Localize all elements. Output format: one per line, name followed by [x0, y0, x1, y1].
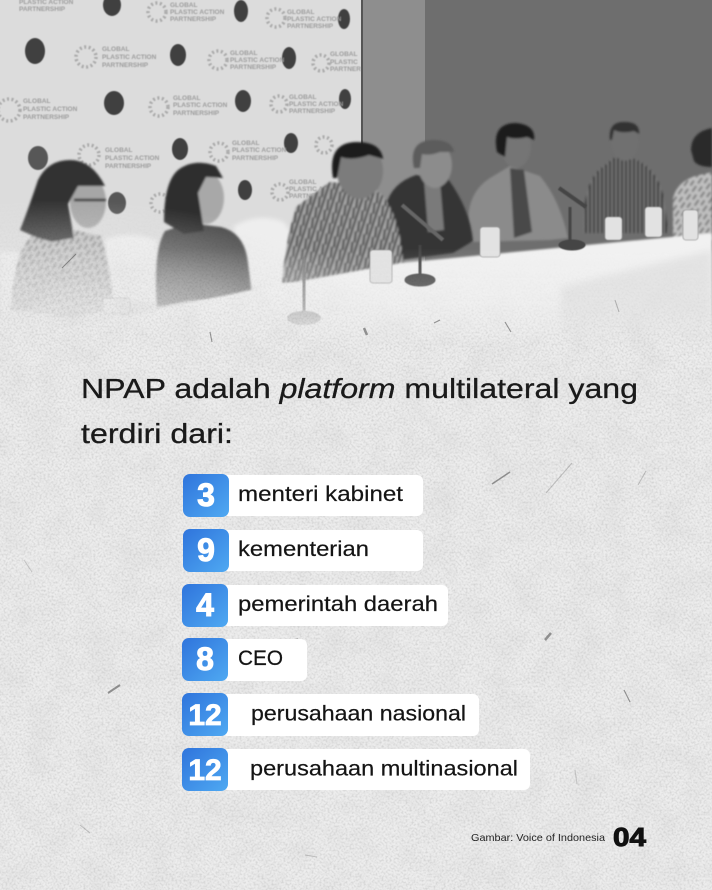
backdrop logos: wordmarks: GLOBAL [232, 140, 259, 147]
row: 12 perusahaan nasional [182, 693, 479, 736]
photo: white chair backs [2, 218, 289, 286]
backdrop logos: wordmarks: GLOBAL [230, 50, 257, 57]
photo: person 1 [11, 160, 114, 318]
photo: panel meeting at long table [0, 0, 712, 345]
photo: white table [202, 232, 712, 341]
photo: logo backdrop [0, 0, 363, 252]
backdrop logos: wordmarks: PLASTIC ACTION [289, 186, 344, 193]
backdrop logos: wordmarks: PLASTIC ACTION [289, 101, 344, 108]
backdrop logos: dotted rings [0, 3, 332, 212]
backdrop logos: wordmarks: PLASTIC ACTION [232, 147, 287, 154]
photo: person 6 [584, 122, 668, 233]
heading [81, 373, 638, 449]
row: 9 kementerian [183, 529, 423, 572]
backdrop logos: wordmarks: PARTNERSHIP [19, 6, 66, 13]
backdrop logos: wordmarks: PLASTIC ACTION [105, 155, 160, 162]
backdrop logos: dark ovals [25, 0, 351, 214]
photo: person 2 [156, 163, 252, 307]
image credit: Gambar: Voice of Indonesia [471, 832, 605, 844]
row: 3 menteri kabinet [183, 474, 423, 517]
photo: water glasses [103, 207, 698, 313]
backdrop logos: wordmarks: GLOBAL [287, 9, 314, 16]
backdrop logos: wordmarks: GLOBAL [173, 95, 200, 102]
row: 9 kementerian: 9 [197, 532, 215, 568]
backdrop logos: wordmarks: PLASTIC ACTION [170, 9, 225, 16]
backdrop logos: wordmarks: PARTNERSHIP [230, 64, 277, 71]
row: 3 menteri kabinet: 3 [197, 477, 215, 513]
photo: dark wall [425, 0, 712, 345]
photo: microphones [287, 188, 586, 325]
backdrop logos: wordmarks: PARTNERSHIP [173, 110, 220, 117]
photo: table cloth shadow [564, 252, 712, 310]
backdrop logos: wordmarks: PARTNERSHIP [289, 108, 336, 115]
heading: terdiri dari: [81, 418, 233, 449]
backdrop logos: wordmarks: GLOBAL [289, 94, 316, 101]
backdrop logos: wordmarks: GLOBAL [105, 147, 132, 154]
backdrop logos: wordmarks: PARTNERSHIP [105, 163, 152, 170]
row: 12 perusahaan nasional: 12 [188, 699, 222, 732]
row: 8 CEO [182, 638, 307, 681]
backdrop logos: wordmarks: GLOBAL [170, 2, 197, 9]
row: 8 CEO: CEO [238, 647, 283, 670]
photo: person 4 [386, 140, 473, 262]
backdrop logos: wordmarks: PARTNERSHIP [170, 16, 217, 23]
row: 12 perusahaan nasional: perusahaan nasional [251, 702, 466, 726]
backdrop logos: wordmarks: PLASTIC ACTION [230, 57, 285, 64]
backdrop logos: wordmarks: PARTNERSHIP [232, 155, 279, 162]
row: 12 perusahaan multinasional [182, 748, 530, 791]
backdrop logos: wordmarks: GLOBAL [289, 179, 316, 186]
photo: person 7 [673, 128, 712, 240]
backdrop logos: wordmarks: PLASTIC ACTION [102, 54, 157, 61]
photo: person 5 [468, 123, 568, 242]
backdrop logos: wordmarks: PARTNERSHIP [289, 193, 336, 200]
backdrop logos: wordmarks: PLASTIC ACTION [173, 102, 228, 109]
backdrop logos: wordmarks: GLOBAL [102, 46, 129, 53]
row: 3 menteri kabinet: menteri kabinet [238, 483, 403, 506]
row: 4 pemerintah daerah: 4 [196, 587, 214, 623]
row: 4 pemerintah daerah [182, 584, 448, 627]
backdrop logos: wordmarks: PLASTIC ACTION [287, 16, 342, 23]
backdrop logos: wordmarks: GLOBAL [330, 51, 357, 58]
row: 9 kementerian: kementerian [238, 538, 369, 561]
backdrop logos: wordmarks: PARTNER [330, 66, 361, 73]
backdrop logos: wordmarks: PARTNERSHIP [287, 23, 334, 30]
backdrop logos: wordmarks: PLASTIC ACTION [23, 106, 78, 113]
paper scratches [24, 254, 646, 857]
backdrop logos: wordmarks [19, 0, 361, 200]
backdrop logos: wordmarks: GLOBAL [23, 98, 50, 105]
backdrop logos: wordmarks: PARTNERSHIP [23, 114, 70, 121]
photo: person 3 [282, 142, 405, 284]
photo: side wall [363, 0, 425, 264]
backdrop logos: wordmarks: PLASTIC [330, 59, 358, 66]
row: 8 CEO: 8 [196, 641, 214, 677]
row: 4 pemerintah daerah: pemerintah daerah [238, 593, 438, 616]
backdrop logos: wordmarks: PARTNERSHIP [102, 62, 149, 69]
heading: NPAP adalah platform multilateral yang [81, 373, 638, 404]
row: 12 perusahaan multinasional: 12 [188, 754, 222, 787]
list: NPAP members [182, 474, 530, 791]
page number: 04 [613, 822, 647, 852]
row: 12 perusahaan multinasional: perusahaan multinasional [250, 758, 518, 780]
